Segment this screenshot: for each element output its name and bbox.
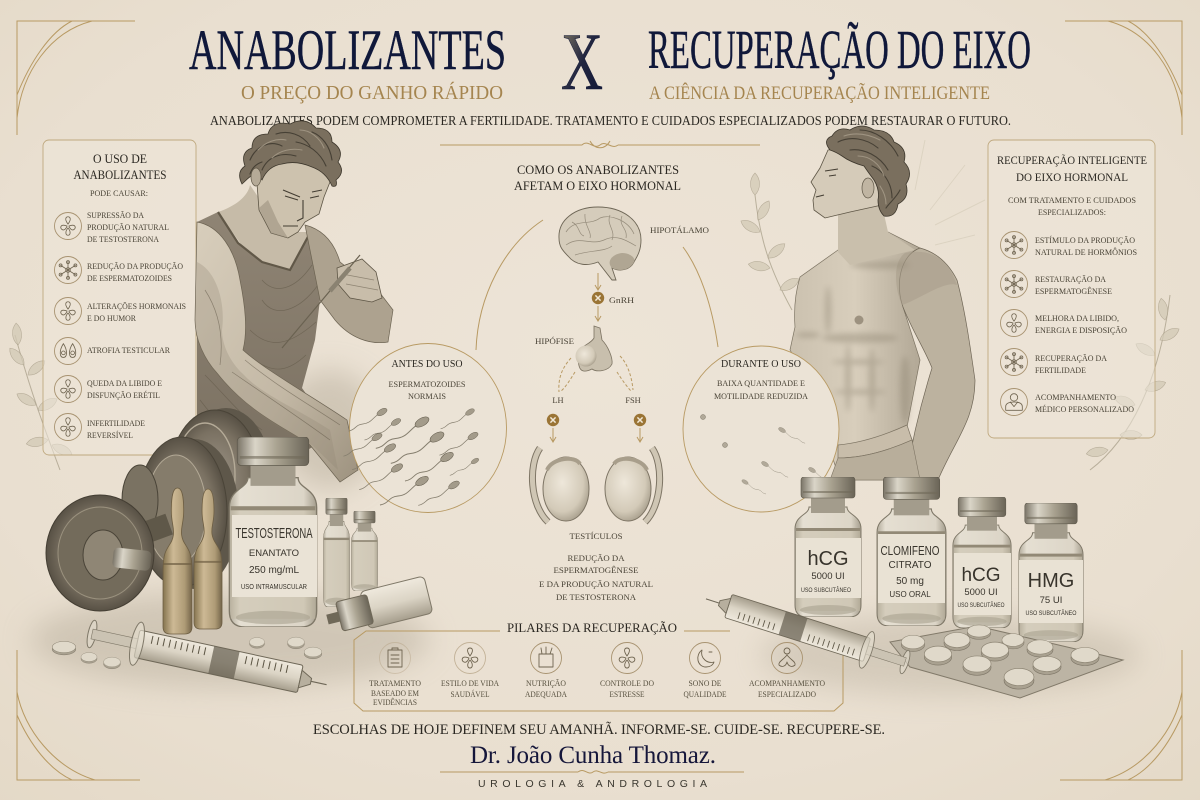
item: alterações: ALTERAÇÕES HORMONAIS bbox=[87, 301, 186, 311]
vial: hcg 1: 5000 UI bbox=[811, 571, 845, 582]
leaves: left branch bbox=[6, 323, 74, 470]
panel: left list bbox=[43, 140, 196, 455]
item: melhora bbox=[1000, 310, 1127, 336]
ampoule 2 bbox=[194, 489, 222, 629]
vial: testosterona: USO INTRAMUSCULAR bbox=[241, 582, 307, 591]
label: fsh: FSH bbox=[625, 396, 641, 405]
pillar: controle: CONTROLE DO bbox=[600, 679, 654, 688]
durante heading: DURANTE O USO bbox=[721, 358, 801, 370]
vial: hmg bbox=[1019, 503, 1083, 642]
right panel subheading: COM TRATAMENTO E CUIDADOS bbox=[1008, 196, 1136, 205]
item: redução: DE ESPERMATOZOIDES bbox=[87, 274, 172, 283]
small vial 1 bbox=[323, 498, 350, 607]
vial: hcg 2: 5000 UI bbox=[964, 587, 998, 598]
vial: hcg 1 bbox=[795, 477, 861, 617]
tagline: ANABOLIZANTES PODEM COMPROMETER A FERTILIDADE. TRATAMENTO E CUIDADOS ESPECIALIZADOS PODEM RESTAURAR O FUTURO. bbox=[210, 113, 1011, 128]
item: melhora: MELHORA DA LIBIDO, bbox=[1035, 314, 1119, 323]
panel heading: O USO DE bbox=[93, 151, 147, 166]
pillar: tratamento: TRATAMENTO bbox=[369, 679, 421, 688]
right panel heading line 2: DO EIXO HORMONAL bbox=[1016, 170, 1128, 184]
item: libido: DISFUNÇÃO ERÉTIL bbox=[87, 390, 160, 400]
small vial 2 bbox=[351, 511, 378, 591]
panel: pilares bbox=[354, 631, 843, 711]
arrow bbox=[595, 273, 601, 290]
vial: hmg: 75 UI bbox=[1040, 595, 1062, 606]
item: restauração bbox=[1000, 270, 1112, 298]
vial: clomifeno: 50 mg bbox=[896, 576, 924, 587]
vial: hcg 2: hCG bbox=[961, 565, 1001, 586]
item: infertilidade: REVERSÍVEL bbox=[87, 430, 133, 440]
item: melhora: ENERGIA E DISPOSIÇÃO bbox=[1035, 325, 1127, 335]
x badge: lh bbox=[547, 414, 559, 426]
vial: testosterona bbox=[229, 437, 317, 627]
arrow bbox=[595, 306, 601, 321]
item: acompanhamento bbox=[1000, 388, 1134, 416]
right panel heading: RECUPERAÇÃO INTELIGENTE bbox=[997, 153, 1147, 167]
item: acompanhamento: ACOMPANHAMENTO bbox=[1035, 393, 1116, 402]
item: supressão: SUPRESSÃO DA bbox=[87, 210, 144, 220]
vial: hmg: HMG bbox=[1028, 570, 1074, 592]
footer slogan: ESCOLHAS DE HOJE DEFINEM SEU AMANHÃ. INFORME-SE. CUIDE-SE. RECUPERE-SE. bbox=[313, 722, 885, 738]
pillar: sono: QUALIDADE bbox=[684, 690, 727, 699]
item: supressão bbox=[54, 210, 169, 244]
item: fertilidade: FERTILIDADE bbox=[1035, 366, 1086, 375]
x badge: fsh bbox=[634, 414, 646, 426]
hair bbox=[240, 121, 342, 186]
testicles bbox=[532, 448, 660, 522]
arrow bbox=[550, 428, 556, 442]
blister pack bbox=[890, 625, 1123, 698]
item: atrofia: ATROFIA TESTICULAR bbox=[87, 346, 170, 355]
syringe in hand bbox=[282, 255, 360, 348]
item: estímulo bbox=[1000, 232, 1137, 258]
vial: testosterona: TESTOSTERONA bbox=[236, 525, 312, 542]
pillar: tratamento: EVIDÊNCIAS bbox=[373, 697, 417, 707]
arrow bbox=[637, 428, 643, 442]
pillar: estilo de vida: ESTILO DE VIDA bbox=[441, 679, 499, 688]
pillar: nutrição: NUTRIÇÃO bbox=[526, 678, 566, 688]
author specialty: UROLOGIA & ANDROLOGIA bbox=[478, 778, 707, 790]
item: estímulo: NATURAL DE HORMÔNIOS bbox=[1035, 247, 1137, 257]
pills left bbox=[52, 637, 322, 669]
syringe right bbox=[700, 581, 914, 681]
item: acompanhamento: MÉDICO PERSONALIZADO bbox=[1035, 404, 1134, 414]
hair bbox=[826, 126, 910, 216]
label: testículos: TESTÍCULOS bbox=[570, 531, 623, 541]
label: lh: LH bbox=[552, 396, 564, 405]
item: infertilidade: INFERTILIDADE bbox=[87, 419, 145, 428]
item: supressão: PRODUÇÃO NATURAL bbox=[87, 222, 169, 232]
text: espermatogênese: ESPERMATOGÊNESE bbox=[554, 565, 638, 575]
ampoule 1 bbox=[163, 488, 192, 634]
title: anabolizantes: ANABOLIZANTES bbox=[189, 19, 506, 82]
vial: clomifeno: CITRATO bbox=[889, 560, 932, 571]
durante text line 2: MOTILIDADE REDUZIDA bbox=[714, 392, 808, 401]
vial: hcg 2 bbox=[953, 497, 1011, 628]
circle: durante o uso bbox=[683, 346, 839, 512]
panel subheading: PODE CAUSAR: bbox=[90, 189, 148, 198]
item: atrofia bbox=[54, 338, 170, 364]
label: hipófise: HIPÓFISE bbox=[535, 336, 574, 346]
vial: clomifeno: USO ORAL bbox=[889, 590, 931, 599]
heading: pilares: PILARES DA RECUPERAÇÃO bbox=[507, 620, 677, 635]
item: fertilidade bbox=[1000, 348, 1107, 376]
right panel subheading line 2: ESPECIALIZADOS: bbox=[1038, 208, 1106, 217]
item: redução bbox=[54, 256, 183, 284]
sperm reduced bbox=[700, 414, 835, 494]
item: infertilidade bbox=[54, 414, 145, 440]
item: fertilidade: RECUPERAÇÃO DA bbox=[1035, 353, 1107, 363]
author name: Dr. João Cunha Thomaz. bbox=[470, 742, 716, 769]
pillar: nutrição bbox=[525, 642, 567, 699]
heading: como os anabolizantes: COMO OS ANABOLIZANTES bbox=[517, 162, 679, 177]
subtitle left: O PREÇO DO GANHO RÁPIDO bbox=[241, 82, 503, 104]
footer ornament bbox=[440, 770, 744, 773]
antes heading: ANTES DO USO bbox=[392, 358, 463, 370]
leaves: upper right branch bbox=[739, 173, 801, 310]
sperm normal bbox=[343, 407, 480, 505]
illustration: man injecting bbox=[195, 121, 393, 490]
illustration: man looking up bbox=[790, 126, 985, 480]
panel: right list bbox=[988, 140, 1155, 438]
panel heading line 2: ANABOLIZANTES bbox=[74, 167, 166, 182]
text: produção natural: E DA PRODUÇÃO NATURAL bbox=[539, 579, 653, 589]
circle: antes do uso bbox=[343, 344, 506, 512]
antes text: ESPERMATOZOIDES bbox=[388, 380, 466, 389]
pillar: controle: ESTRESSE bbox=[610, 690, 645, 699]
pillar: estilo de vida: SAUDÁVEL bbox=[450, 689, 490, 699]
item: estímulo: ESTÍMULO DA PRODUÇÃO bbox=[1035, 235, 1135, 245]
pillar: sono: SONO DE bbox=[688, 679, 722, 688]
title: X: X bbox=[561, 16, 603, 107]
vial: hcg 1: hCG bbox=[807, 548, 849, 570]
vial: hcg 2: USO SUBCUTÂNEO bbox=[958, 600, 1004, 609]
pillar: controle bbox=[600, 642, 654, 699]
pillar: tratamento bbox=[369, 642, 421, 707]
pillar: estilo de vida bbox=[441, 642, 499, 699]
dumbbell bbox=[46, 408, 272, 611]
head bbox=[811, 126, 910, 218]
syringe left bbox=[83, 612, 331, 706]
pillar: acompanhamento: ESPECIALIZADO bbox=[758, 690, 816, 699]
floor shadow right bbox=[760, 615, 1140, 695]
pillar: acompanhamento: ACOMPANHAMENTO bbox=[749, 679, 825, 688]
item: restauração: RESTAURAÇÃO DA bbox=[1035, 274, 1106, 284]
label: hipotálamo: HIPOTÁLAMO bbox=[650, 225, 709, 235]
leaves: lower right branch bbox=[1086, 295, 1181, 470]
heading line 2: AFETAM O EIXO HORMONAL bbox=[514, 178, 681, 193]
pituitary bbox=[576, 326, 612, 371]
item: supressão: DE TESTOSTERONA bbox=[87, 235, 159, 244]
item: alterações bbox=[54, 298, 186, 324]
brain bbox=[559, 207, 641, 280]
vial: testosterona: ENANTATO bbox=[249, 548, 299, 559]
pillar: acompanhamento bbox=[749, 642, 825, 699]
head bbox=[240, 121, 342, 238]
item: libido bbox=[54, 376, 162, 402]
pillar: nutrição: ADEQUADA bbox=[525, 690, 567, 699]
item: alterações: E DO HUMOR bbox=[87, 314, 136, 323]
vial: clomifeno bbox=[877, 477, 946, 626]
item: redução: REDUÇÃO DA PRODUÇÃO bbox=[87, 261, 183, 271]
shading: chest and abs bbox=[796, 261, 910, 424]
vial: clomifeno: CLOMIFENO bbox=[880, 543, 940, 558]
durante text: BAIXA QUANTIDADE E bbox=[717, 379, 805, 388]
pillar: sono bbox=[684, 642, 727, 699]
floor shadow left bbox=[30, 592, 430, 688]
subtitle right: A CIÊNCIA DA RECUPERAÇÃO INTELIGENTE bbox=[649, 82, 990, 104]
dashed arrows to lh fsh bbox=[559, 356, 633, 392]
ornament divider bbox=[440, 141, 760, 148]
vial: hcg 1: USO SUBCUTÂNEO bbox=[801, 585, 851, 594]
lying vial bbox=[323, 576, 433, 638]
antes text line 2: NORMAIS bbox=[408, 392, 446, 401]
x badge: gnrh bbox=[592, 292, 604, 304]
pillar: tratamento: BASEADO EM bbox=[371, 689, 419, 698]
text: de testosterona: DE TESTOSTERONA bbox=[556, 593, 636, 602]
item: restauração: ESPERMATOGÊNESE bbox=[1035, 286, 1112, 296]
item: libido: QUEDA DA LIBIDO E bbox=[87, 379, 162, 388]
vial: hmg: USO SUBCUTÂNEO bbox=[1026, 608, 1076, 617]
text: redução: REDUÇÃO DA bbox=[568, 553, 624, 563]
arcs around axis bbox=[476, 220, 718, 350]
label: gnrh: GnRH bbox=[609, 296, 634, 305]
vial: testosterona: 250 mg/mL bbox=[249, 565, 299, 576]
